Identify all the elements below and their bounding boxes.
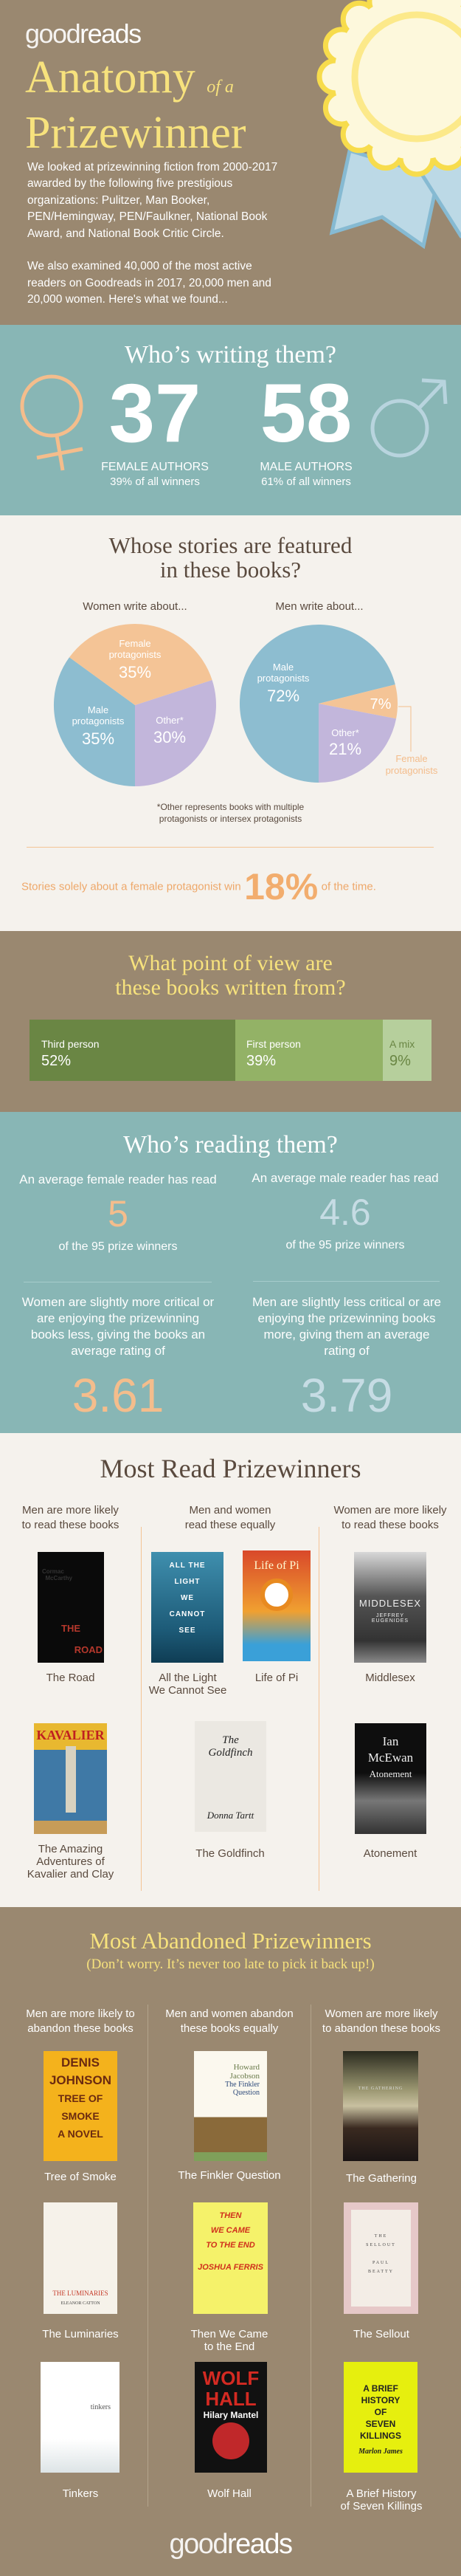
stat: male authors: 58 (260, 367, 352, 459)
panel: women abandon: of Seven Killings (341, 2500, 422, 2513)
section: writers background (0, 325, 461, 515)
pie labels men: Female (395, 753, 428, 764)
book: The Sellout (344, 2202, 418, 2314)
footnote: protagonists or intersex protagonists (159, 814, 302, 824)
book: Tree of Smoke (44, 2051, 117, 2161)
chart: pie women (53, 624, 216, 786)
book: Tree of Smoke: SMOKE (61, 2110, 100, 2122)
stat: male authors: 61% of all winners (261, 475, 351, 488)
heading: point of view (115, 951, 346, 1000)
title: Prizewinner (25, 108, 246, 158)
pie labels women: protagonists (72, 715, 124, 727)
panel: read equally: The Goldfinch (195, 1847, 265, 1860)
book: A Brief History of Seven Killings: Marlon James (358, 2448, 403, 2456)
chart: point of view bar: Third person (41, 1038, 100, 1050)
panel: equally abandon: Wolf Hall (207, 2487, 252, 2500)
book: The Luminaries (44, 2202, 117, 2314)
label: women write about: Women write about... (83, 600, 187, 613)
panel: read equally: All the Light (159, 1672, 217, 1684)
pie labels men: 72% (267, 687, 299, 705)
pie labels women: Female (119, 638, 151, 649)
panel: women abandon: Women are more likely (325, 2007, 438, 2020)
heading: point of view: What point of view are (128, 951, 333, 975)
book: Then We Came to the End (193, 2202, 268, 2314)
panel: equally abandon: The Finkler Question (178, 2169, 281, 2182)
book: A Brief History of Seven Killings: HISTORY (361, 2395, 400, 2405)
book: Life of Pi (243, 1550, 311, 1661)
chart: point of view bar (30, 1020, 431, 1081)
panel: men read more: to read these books (22, 1519, 119, 1531)
book: The Road: THE (61, 1623, 80, 1634)
stat: women rating (22, 1295, 214, 1422)
book: Tinkers (41, 2362, 119, 2473)
panel: read equally: We Cannot See (149, 1684, 226, 1697)
book: Kavalier and Clay: KAVALIER (36, 1728, 105, 1742)
pie labels women: Male (88, 704, 108, 715)
stat: male reader: An average male reader has read (252, 1171, 439, 1185)
stat: female authors: 37 (109, 367, 201, 459)
divider (27, 847, 434, 848)
book: The Goldfinch (195, 1721, 266, 1832)
book: The Finkler Question: Howard (234, 2063, 260, 2072)
stat: female reader: 5 (108, 1193, 128, 1234)
book: Middlesex: MIDDLESEX (359, 1598, 421, 1609)
footnote (157, 802, 304, 824)
stat: female authors: FEMALE AUTHORS (101, 461, 209, 473)
section: point of view background (0, 931, 461, 1112)
book: Atonement: Ian (383, 1734, 398, 1748)
panel: equally abandon: Then We Came (191, 2328, 268, 2340)
panel: equally abandon (165, 2007, 294, 2500)
icon: rosette award (317, 0, 461, 250)
panel: women read more: to read these books (342, 1519, 439, 1531)
stat: female authors: 39% of all winners (110, 475, 200, 488)
book: A Brief History of Seven Killings (344, 2362, 417, 2473)
panel: women abandon (322, 2007, 440, 2513)
pie labels women: 35% (82, 729, 114, 748)
pie labels men: protagonists (257, 673, 309, 684)
book: Atonement: Atonement (370, 1768, 412, 1779)
panel: men abandon: Tree of Smoke (44, 2171, 117, 2183)
panel: equally abandon: to the End (204, 2340, 254, 2353)
heading: most read: Most Read Prizewinners (100, 1454, 361, 1483)
book: The Goldfinch: The (222, 1734, 239, 1746)
pie labels men: 7% (370, 696, 391, 712)
stat: male reader (252, 1171, 439, 1251)
heading: most abandoned (86, 1928, 375, 1972)
panel: women read more: Atonement (364, 1847, 417, 1860)
book: Then We Came to the End: THEN (220, 2211, 241, 2220)
book: A Brief History of Seven Killings: SEVEN (366, 2419, 395, 2429)
book: The Luminaries: ELEANOR CATTON (60, 2301, 100, 2306)
stat: female reader: An average female reader has read (19, 1172, 217, 1186)
pie labels women: protagonists (109, 649, 161, 660)
heading: whose stories: in these books? (160, 557, 301, 583)
pie labels women: 30% (153, 728, 186, 746)
stat: female reader: of the 95 prize winners (59, 1240, 177, 1253)
book: Life of Pi: Life of Pi (254, 1559, 299, 1572)
book: Tree of Smoke: JOHNSON (49, 2073, 111, 2087)
heading: point of view: these books written from? (115, 975, 346, 1000)
chart: point of view bar: 39% (246, 1053, 276, 1069)
pie labels women: Other* (156, 715, 184, 726)
book: The Road: ROAD (74, 1644, 103, 1655)
title: Anatomy of a (25, 52, 234, 103)
logo: goodreads top: goodreads (25, 18, 141, 49)
book: Middlesex: JEFFREY (376, 1613, 404, 1618)
panel: men read more: Adventures of (36, 1855, 105, 1868)
panel: women read more: Women are more likely (333, 1504, 447, 1517)
callout: 18%: Stories solely about a female protagonist win 18% of the time. (21, 866, 376, 907)
book: Atonement: McEwan (368, 1751, 413, 1765)
book: The Finkler Question: Question (233, 2089, 260, 2097)
text block: intro (27, 161, 277, 306)
book: Wolf Hall: HALL (205, 2388, 257, 2410)
section: intro background (0, 0, 461, 325)
pie labels men (257, 662, 437, 776)
panel: women abandon: The Sellout (353, 2328, 409, 2340)
panel: men read more: Men are more likely (22, 1504, 119, 1517)
panel: men read more: The Road (46, 1672, 94, 1684)
panel: men abandon: abandon these books (27, 2022, 134, 2035)
icon: male symbol (370, 378, 447, 458)
stat: female authors (101, 367, 209, 488)
panel: read equally: Life of Pi (255, 1672, 298, 1684)
book: The Sellout: BEATTY (368, 2270, 394, 2274)
book: The Finkler Question: Jacobson (230, 2072, 260, 2081)
panel: women abandon: to abandon these books (322, 2022, 440, 2035)
book: The Gathering: THE GATHERING (358, 2086, 403, 2091)
book: The Road: McCarthy (45, 1575, 72, 1581)
chart: point of view bar: First person (246, 1038, 301, 1050)
book: All the Light We Cannot See: SEE (178, 1627, 196, 1635)
panel: women abandon: The Gathering (346, 2172, 417, 2185)
book: A Brief History of Seven Killings: KILLINGS (360, 2431, 401, 2441)
panel: men abandon: The Luminaries (42, 2328, 119, 2340)
book: All the Light We Cannot See: WE (181, 1594, 194, 1602)
heading: most abandoned: Most Abandoned Prizewinners (89, 1928, 372, 1954)
book: Tree of Smoke: DENIS (61, 2055, 100, 2070)
panel: read equally: Men and women (190, 1504, 271, 1517)
heading: most abandoned: (Don’t worry. It’s never too late to pick it back up!) (86, 1957, 375, 1972)
text block: intro: We also examined 40,000 of the most active readers on Goodreads in 2017, 20,000 men and 20,000 women. Here's what we found... (27, 260, 271, 306)
icon: female symbol (21, 375, 83, 471)
book: The Finkler Question: The Finkler (225, 2081, 260, 2089)
book: A Brief History of Seven Killings: A BRIEF (363, 2383, 398, 2394)
stat: male reader: 4.6 (319, 1192, 371, 1233)
title (25, 52, 246, 158)
stat: men rating: Men are slightly less critical or are enjoying the prizewinning books more, giving them an average rating of (252, 1295, 441, 1358)
book: Then We Came to the End: JOSHUA FERRIS (198, 2263, 263, 2272)
book: The Sellout: SELLOUT (366, 2243, 396, 2247)
panel: equally abandon: Men and women abandon (165, 2007, 294, 2020)
book: Tree of Smoke: TREE OF (58, 2092, 103, 2104)
chart: point of view bar: A mix (389, 1038, 415, 1050)
pie labels men: Other* (331, 727, 359, 738)
chart: point of view bar: 9% (389, 1053, 411, 1069)
column dividers most read (141, 1527, 142, 1891)
book: All the Light We Cannot See (151, 1552, 223, 1663)
logo: goodreads bottom: goodreads (169, 2529, 292, 2560)
pie labels men: 21% (329, 740, 361, 758)
stat: female reader (19, 1172, 217, 1253)
panel: men abandon: Tinkers (63, 2487, 98, 2500)
book: Then We Came to the End: WE CAME (211, 2226, 250, 2235)
book: The Gathering (343, 2051, 418, 2161)
book: Wolf Hall: WOLF (203, 2367, 259, 2389)
pie labels men: Male (273, 662, 294, 673)
stat: women rating: Women are slightly more critical or are enjoying the prizewinning books less, giving the books an average rating of (22, 1295, 214, 1358)
stat: male authors: MALE AUTHORS (260, 461, 353, 473)
book: Tree of Smoke: A NOVEL (58, 2128, 103, 2140)
panel: men read more: The Amazing (38, 1843, 103, 1855)
book: Middlesex: EUGENIDES (372, 1618, 409, 1624)
heading: who's writing: Who’s writing them? (125, 341, 336, 368)
panel: women abandon: A Brief History (346, 2487, 417, 2500)
stat: women rating: 3.61 (72, 1369, 164, 1422)
book: The Finkler Question (194, 2051, 267, 2161)
book: Wolf Hall: Hilary Mantel (204, 2410, 258, 2420)
book: The Goldfinch: Donna Tartt (207, 1810, 254, 1821)
panel: women read more: Middlesex (365, 1672, 415, 1684)
stat: men rating: 3.79 (301, 1369, 392, 1422)
book: Tinkers: tinkers (91, 2403, 111, 2411)
panel: men read more (22, 1504, 119, 1881)
text block: intro: We looked at prizewinning fiction from 2000-2017 awarded by the following five prestigious organizations: Pulitzer, Man Booker, PEN/Hemingway, PEN/Faulkner, National Book Award, and National Book Critic Circle. (27, 161, 277, 240)
book: All the Light We Cannot See: CANNOT (170, 1610, 205, 1618)
section: abandoned background (0, 1907, 461, 2576)
panel: equally abandon: these books equally (181, 2022, 278, 2035)
stat: male reader: of the 95 prize winners (286, 1239, 404, 1251)
book: The Sellout: PAUL (372, 2261, 389, 2265)
pie labels women: 35% (119, 663, 151, 681)
book: All the Light We Cannot See: ALL THE (169, 1562, 206, 1570)
pie labels men: protagonists (386, 765, 437, 776)
label: men write about: Men write about... (275, 600, 364, 613)
book: Wolf Hall (195, 2362, 267, 2473)
panel: women read more (333, 1504, 447, 1860)
book: Middlesex (354, 1552, 426, 1663)
book: Atonement (355, 1723, 426, 1834)
book: A Brief History of Seven Killings: OF (375, 2407, 387, 2417)
footnote: *Other represents books with multiple (157, 802, 304, 812)
book: All the Light We Cannot See: LIGHT (174, 1578, 201, 1586)
book: Kavalier and Clay (34, 1723, 107, 1834)
heading: whose stories: Whose stories are featured (109, 532, 352, 558)
panel: men read more: Kavalier and Clay (27, 1868, 114, 1881)
section: readers background (0, 1112, 461, 1433)
panel: read equally: read these equally (185, 1519, 275, 1531)
book: The Goldfinch: Goldfinch (208, 1747, 252, 1759)
heading: who's reading: Who’s reading them? (123, 1131, 338, 1158)
chart: point of view bar: 52% (41, 1053, 71, 1069)
panel: read equally (149, 1504, 311, 1860)
book: Then We Came to the End: TO THE END (206, 2241, 255, 2250)
chart: pie men (240, 625, 412, 783)
stat: men rating (252, 1295, 441, 1422)
book: The Road (38, 1552, 104, 1663)
book: The Sellout: THE (375, 2234, 387, 2239)
book: The Road: Cormac (42, 1568, 64, 1575)
panel: men abandon (26, 2007, 135, 2500)
book: The Luminaries: THE LUMINARIES (52, 2290, 108, 2297)
panel: men abandon: Men are more likely to (26, 2007, 135, 2020)
pie labels women (72, 638, 186, 748)
heading: whose stories (109, 532, 352, 583)
